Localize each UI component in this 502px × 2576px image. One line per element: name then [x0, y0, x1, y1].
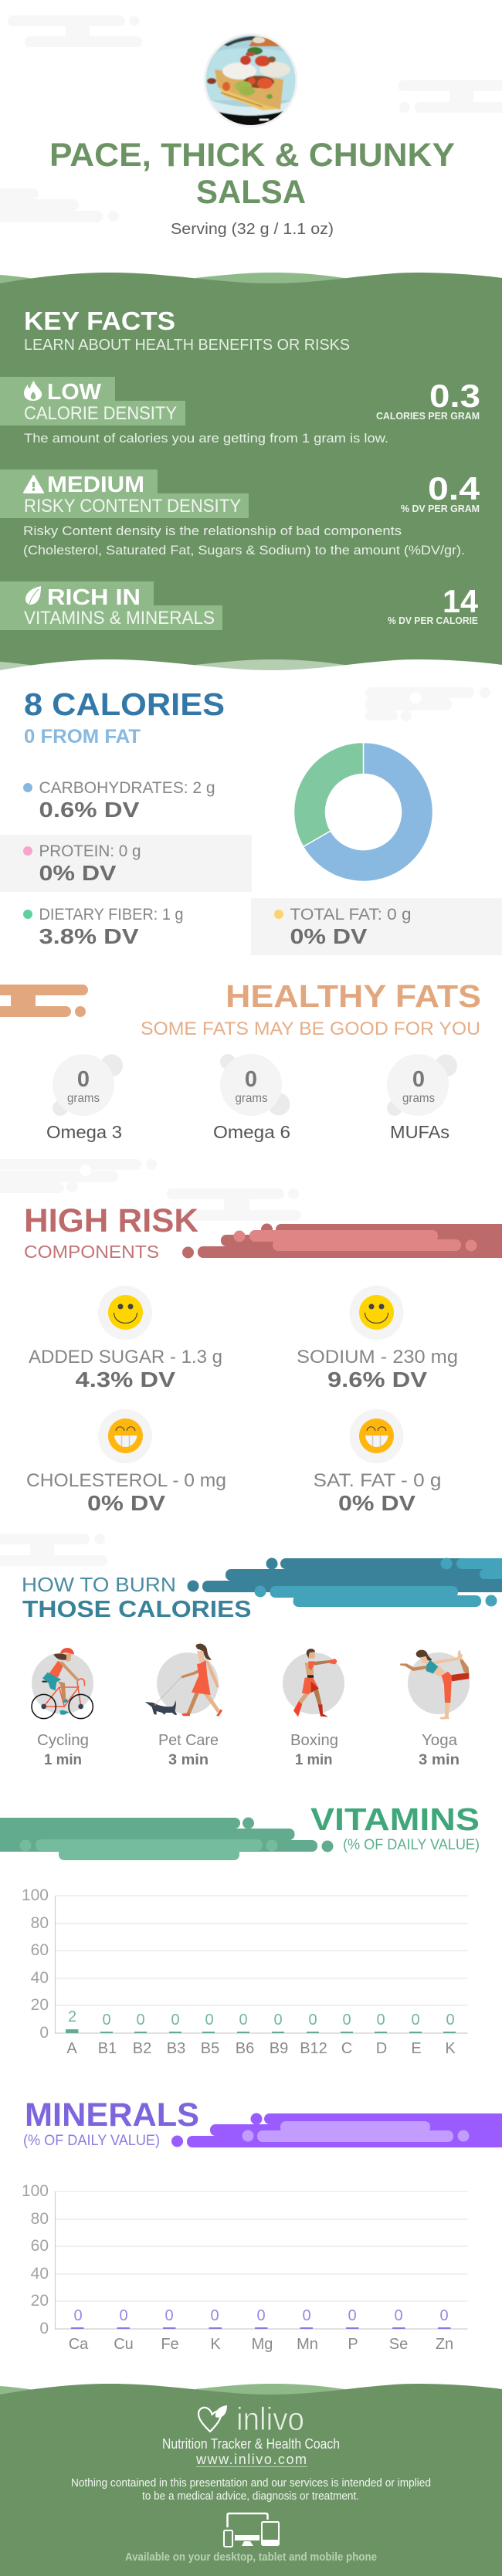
- disclaimer: to be a medical advice, diagnosis or treatment.: [142, 2490, 359, 2503]
- bar chart: minerals: 0: [73, 2307, 83, 2324]
- serving size: Serving (32 g / 1.1 oz): [171, 221, 334, 238]
- decoration bars: [182, 1223, 502, 1259]
- activity: pet care: [145, 1644, 222, 1768]
- activity: yoga: Yoga: [422, 1732, 458, 1749]
- omega 6: grams: [235, 1092, 267, 1105]
- bar chart: vitamins: D: [376, 2040, 387, 2057]
- mufas: [387, 1054, 457, 1142]
- bar chart: minerals: 0: [39, 2320, 49, 2337]
- activity: cycling: [32, 1648, 93, 1768]
- icon: leaf: [25, 586, 41, 605]
- rating: rich in: RICH IN: [47, 585, 141, 610]
- bar chart: vitamins: 0: [273, 2012, 283, 2029]
- value 0.3: 0.3: [429, 378, 480, 414]
- bar chart: vitamins: 20: [31, 1996, 49, 2014]
- omega 3: [46, 1054, 123, 1142]
- bar chart: minerals: 80: [31, 2210, 49, 2228]
- panel: minerals: [22, 2096, 502, 2353]
- cholesterol: [26, 1409, 226, 1515]
- bar chart: vitamins: B12: [300, 2040, 327, 2057]
- bar chart: vitamins: B5: [201, 2040, 219, 2057]
- bar chart: vitamins: K: [445, 2040, 456, 2057]
- bar chart: vitamins: 0: [239, 2012, 248, 2029]
- label: calorie density: CALORIE DENSITY: [24, 403, 177, 424]
- activity: cycling: Cycling: [37, 1732, 89, 1749]
- legend: protein: [0, 835, 252, 892]
- bar chart: vitamins: 0: [171, 2012, 180, 2029]
- bar chart: vitamins: C: [341, 2040, 352, 2057]
- added sugar: 4.3% DV: [76, 1368, 175, 1391]
- bar chart: minerals: 0: [348, 2307, 357, 2324]
- minerals unit: (% OF DAILY VALUE): [23, 2133, 160, 2149]
- legend: total fat: [251, 898, 502, 955]
- bar chart: minerals: 0: [210, 2307, 219, 2324]
- sodium: [297, 1286, 458, 1391]
- omega 6: 0: [245, 1067, 257, 1092]
- rating: medium: MEDIUM: [47, 473, 144, 497]
- icon: grin: [359, 1418, 394, 1453]
- activity: boxing: 1 min: [295, 1752, 332, 1768]
- value 0.4: 0.4: [428, 470, 480, 507]
- sodium: SODIUM - 230 mg: [297, 1347, 458, 1368]
- omega 6: [213, 1054, 290, 1142]
- description: [23, 524, 465, 558]
- bar chart: minerals: 0: [165, 2307, 174, 2324]
- omega 3: 0: [77, 1067, 90, 1092]
- panel: vitamins: [0, 1802, 480, 2057]
- icon: yoga pose: [400, 1650, 470, 1720]
- decoration bars: [0, 985, 88, 1017]
- legend: protein: 0% DV: [39, 861, 117, 885]
- mufas: MUFAs: [390, 1122, 449, 1142]
- how to burn heading: HOW TO BURN: [22, 1573, 176, 1596]
- legend: total fat: 0% DV: [290, 924, 368, 948]
- donut chart: [294, 743, 433, 882]
- bar chart: vitamins: 100: [22, 1886, 49, 1904]
- bar chart: minerals: Se: [389, 2336, 408, 2353]
- bar chart: vitamins: 0: [308, 2012, 317, 2029]
- icon: inlivo heart: [198, 2405, 227, 2432]
- panel: calories: [0, 686, 502, 955]
- bar chart: vitamins: 0: [136, 2012, 145, 2029]
- icon: cyclist: [32, 1648, 93, 1719]
- bar chart: minerals: Mn: [297, 2336, 318, 2353]
- omega 6: Omega 6: [213, 1122, 290, 1142]
- saturated fat: [314, 1409, 442, 1515]
- activity: boxing: Boxing: [290, 1732, 338, 1749]
- legend: protein: PROTEIN: 0 g: [39, 842, 141, 860]
- cholesterol: CHOLESTEROL - 0 mg: [26, 1470, 226, 1491]
- legend: carbohydrates: CARBOHYDRATES: 2 g: [39, 779, 215, 797]
- bar chart: vitamins: A: [66, 2040, 77, 2057]
- calories heading: 8 CALORIES: [24, 686, 225, 722]
- bar chart: vitamins: 0: [39, 2024, 49, 2042]
- rating: low: LOW: [47, 380, 102, 405]
- bar chart: vitamins: B9: [270, 2040, 288, 2057]
- title: [49, 137, 455, 211]
- vitamins unit: (% OF DAILY VALUE): [343, 1837, 480, 1853]
- panel: healthy fats: [0, 978, 481, 1142]
- bar chart: minerals: P: [348, 2336, 358, 2353]
- availability note: Available on your desktop, tablet and mobile phone: [125, 2551, 377, 2564]
- key facts subheading: LEARN ABOUT HEALTH BENEFITS OR RISKS: [24, 337, 350, 354]
- legend: dietary fiber: [23, 906, 184, 948]
- legend: carbohydrates: [23, 779, 215, 822]
- panel: footer: [0, 2384, 502, 2576]
- bar chart: minerals: 40: [31, 2265, 49, 2283]
- activity: yoga: [400, 1650, 470, 1768]
- legend: dietary fiber: DIETARY FIBER: 1 g: [39, 906, 184, 924]
- bar chart: minerals: Zn: [436, 2336, 453, 2353]
- bar chart: minerals: 0: [439, 2307, 449, 2324]
- food photo: [204, 33, 298, 127]
- icon: boxer: [283, 1649, 344, 1717]
- disclaimer: Nothing contained in this presentation and our services is intended or implied: [71, 2476, 431, 2490]
- from fat subheading: 0 FROM FAT: [24, 726, 141, 747]
- activity: pet care: Pet Care: [158, 1732, 219, 1749]
- legend: dietary fiber: 3.8% DV: [39, 924, 139, 948]
- those calories heading: THOSE CALORIES: [22, 1595, 252, 1622]
- legend: total fat: TOTAL FAT: 0 g: [290, 906, 411, 924]
- panel: high risk: [24, 1202, 502, 1515]
- bar chart: vitamins: 0: [205, 2012, 214, 2029]
- unit: % DV PER CALORIE: [388, 615, 478, 626]
- sodium: 9.6% DV: [327, 1368, 427, 1391]
- bar chart: vitamins: E: [411, 2040, 422, 2057]
- icon: smiley: [359, 1295, 394, 1330]
- label: vitamins and minerals: VITAMINS & MINERALS: [24, 608, 215, 629]
- bar chart: vitamins: 0: [102, 2012, 111, 2029]
- bar chart: vitamins: B3: [167, 2040, 185, 2057]
- risky content density: [0, 469, 480, 558]
- bar chart: minerals: 0: [394, 2307, 403, 2324]
- title: SALSA: [196, 174, 306, 211]
- rich in vitamins and minerals: [0, 581, 479, 630]
- bar chart: vitamins: [22, 1886, 468, 2057]
- icon: smiley: [108, 1295, 143, 1330]
- added sugar: ADDED SUGAR - 1.3 g: [29, 1347, 222, 1368]
- bar chart: minerals: Mg: [252, 2336, 273, 2353]
- saturated fat: SAT. FAT - 0 g: [314, 1470, 442, 1491]
- icon: dog walker: [145, 1644, 222, 1717]
- minerals heading: MINERALS: [25, 2096, 199, 2134]
- vitamins heading: VITAMINS: [310, 1802, 480, 1837]
- activity: cycling: 1 min: [44, 1752, 82, 1768]
- logo wordmark: inlivo: [236, 2401, 304, 2437]
- icon: devices: [224, 2513, 279, 2547]
- description: (Cholesterol, Saturated Fat, Sugars & Sodium) to the amount (%DV/gr).: [23, 543, 465, 558]
- bar chart: minerals: 60: [31, 2237, 49, 2255]
- panel: how to burn: [22, 1558, 502, 1768]
- bar chart: minerals: K: [210, 2336, 221, 2353]
- components subheading: COMPONENTS: [24, 1242, 159, 1262]
- bar chart: minerals: 100: [22, 2182, 49, 2200]
- icon: warning: [24, 476, 43, 493]
- mufas: 0: [412, 1067, 425, 1092]
- website: www.inlivo.com: [195, 2452, 307, 2467]
- key facts heading: KEY FACTS: [24, 307, 175, 335]
- description: The amount of calories you are getting from 1 gram is low.: [24, 431, 388, 446]
- bar chart: vitamins: B2: [133, 2040, 151, 2057]
- description: Risky Content density is the relationship of bad components: [23, 524, 402, 538]
- value 14: 14: [443, 583, 479, 619]
- bar chart: vitamins: 80: [31, 1914, 49, 1932]
- bar chart: vitamins: 40: [31, 1969, 49, 1987]
- omega 3: Omega 3: [46, 1122, 122, 1142]
- title: PACE, THICK & CHUNKY: [49, 137, 455, 174]
- bar chart: minerals: Cu: [114, 2336, 134, 2353]
- bar chart: vitamins: 0: [446, 2012, 455, 2029]
- unit: % DV PER GRAM: [401, 503, 480, 514]
- bar chart: minerals: 20: [31, 2292, 49, 2310]
- omega 3: grams: [67, 1092, 100, 1105]
- bar chart: minerals: 0: [256, 2307, 266, 2324]
- calorie density: [0, 377, 480, 446]
- bar chart: vitamins: 2: [68, 2008, 76, 2025]
- tagline: Nutrition Tracker & Health Coach: [162, 2435, 340, 2452]
- decoration bars: [0, 1818, 334, 1860]
- decoration bars: [171, 2113, 502, 2147]
- activity: pet care: 3 min: [168, 1752, 209, 1768]
- legend: carbohydrates: 0.6% DV: [39, 798, 140, 822]
- mufas: grams: [402, 1092, 435, 1105]
- bar chart: minerals: 0: [302, 2307, 311, 2324]
- bar chart: vitamins: B6: [236, 2040, 254, 2057]
- saturated fat: 0% DV: [338, 1491, 416, 1515]
- bar chart: vitamins: 0: [342, 2012, 351, 2029]
- bar chart: vitamins: B1: [98, 2040, 117, 2057]
- bar chart: vitamins: 0: [411, 2012, 420, 2029]
- added sugar: [29, 1286, 222, 1391]
- bar chart: minerals: Ca: [69, 2336, 89, 2353]
- activity: yoga: 3 min: [419, 1752, 460, 1768]
- bar chart: vitamins: 0: [376, 2012, 385, 2029]
- cholesterol: 0% DV: [87, 1491, 165, 1515]
- disclaimer: [71, 2476, 431, 2503]
- bar chart: vitamins: 60: [31, 1941, 49, 1959]
- high risk heading: HIGH RISK: [24, 1202, 198, 1239]
- label: risky content density: RISKY CONTENT DENSITY: [24, 496, 241, 517]
- healthy fats heading: HEALTHY FATS: [226, 978, 481, 1014]
- panel: key facts: [0, 273, 502, 683]
- unit: CALORIES PER GRAM: [376, 410, 480, 422]
- icon: grin: [108, 1418, 143, 1453]
- bar chart: minerals: 0: [119, 2307, 128, 2324]
- icon: flame: [24, 381, 42, 401]
- healthy fats subheading: SOME FATS MAY BE GOOD FOR YOU: [141, 1019, 480, 1039]
- bar chart: minerals: Fe: [161, 2336, 179, 2353]
- activity: boxing: [283, 1649, 344, 1768]
- decoration bars: [187, 1558, 502, 1607]
- bar chart: minerals: [22, 2182, 468, 2353]
